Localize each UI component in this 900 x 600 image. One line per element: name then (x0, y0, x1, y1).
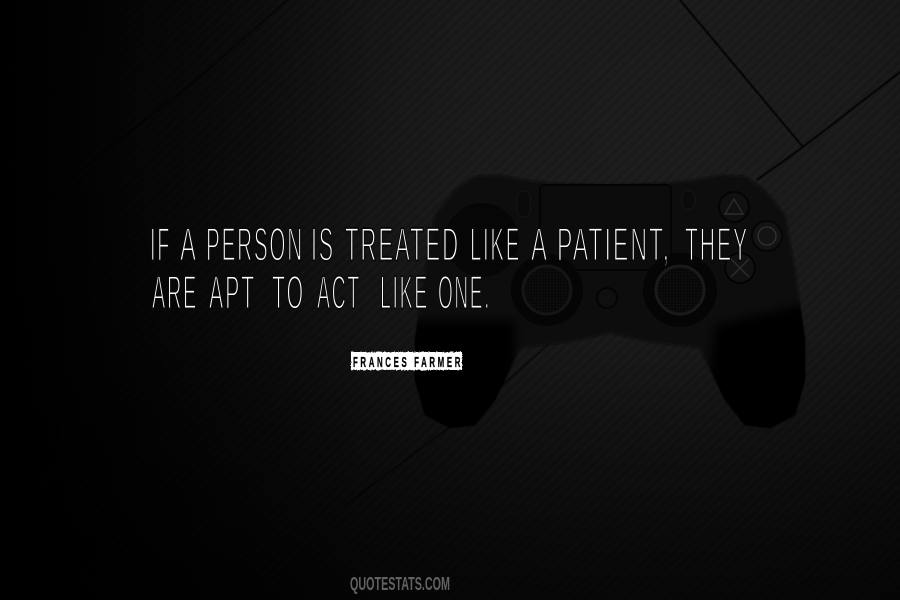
triangle button (719, 192, 749, 222)
quote line 2: ARE (152, 266, 198, 318)
quote line 1: IF (150, 218, 171, 270)
left thumbstick (511, 254, 583, 326)
share button (517, 191, 530, 217)
controller body (415, 175, 805, 428)
author label: FRANCES FARMER (353, 354, 463, 371)
quote line 1: PERSON (206, 218, 304, 270)
d-pad well (444, 202, 520, 278)
quote line 2: APT (209, 266, 256, 318)
touchpad (540, 185, 671, 270)
right thumbstick (643, 253, 717, 327)
quote text: ONE. (438, 266, 491, 318)
quote line 2 (152, 266, 491, 318)
quote line 1: A (180, 218, 198, 270)
quote card: THEY (685, 218, 749, 270)
quote line 2: ACT (317, 266, 361, 318)
quote line 2: LIKE (380, 266, 429, 318)
quote line 1: TREATED (345, 218, 460, 270)
quote line 1 (150, 218, 749, 270)
circle button (752, 221, 782, 251)
quote line 1: LIKE (470, 218, 521, 270)
PS button (597, 288, 617, 308)
quote line 1: A (531, 218, 549, 270)
quote line 1: IS (311, 218, 335, 270)
quote text (150, 218, 749, 318)
cross button (725, 253, 755, 283)
quote line 2: TO (272, 266, 305, 318)
quote line 1: PATIENT, (557, 218, 671, 270)
grip shadows (415, 304, 805, 428)
source watermark: QUOTESTATS.COM (350, 574, 450, 594)
options button (682, 191, 695, 209)
game controller (414, 174, 806, 428)
author label (351, 352, 463, 371)
